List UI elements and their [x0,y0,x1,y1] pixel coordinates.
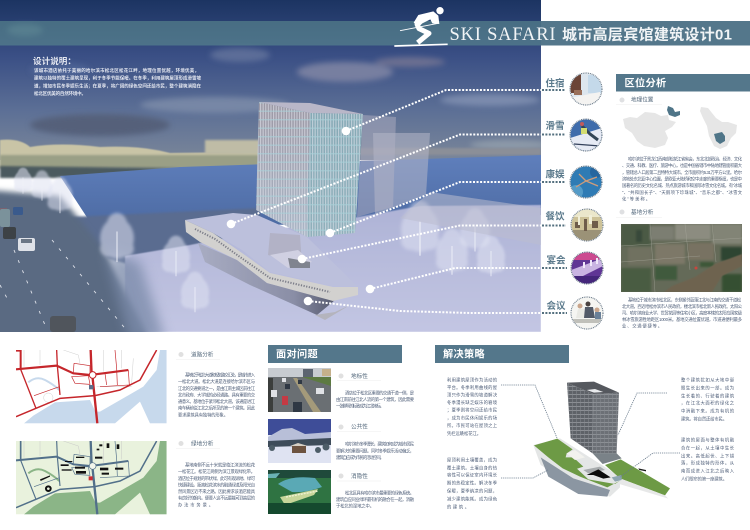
horizon clouds and land [0,140,541,178]
text: location paragraph [622,156,743,202]
text: strategy right top: 眼生长出来的一部。成为 [681,384,734,392]
text: strategy left bottom: 覆土建筑。土壤自身的热 [447,464,498,472]
text: landmark: 由江南前往江北人流的第一个建筑，因此需要 [336,396,415,403]
text: site paragraph: 林冰雪旅游胜地距区1000米。基地交通位置优越，市道通便利最多 [622,316,743,323]
text: strategy left bottom: 屋顶利用土壤覆盖，成为 [447,456,497,464]
heading: problems: 面对问题 [276,348,318,360]
text: strategy right bottom: 建筑的屋面与整体有机融 [681,436,735,444]
text: public: 公共性 [351,422,368,430]
heading: location analysis: 区位分析 [624,76,666,90]
text: landmark: 酒店位于松北区重要的交通干道一侧，是 [345,390,415,396]
ramp [605,459,670,495]
photo: highway [268,368,331,412]
function labels: 会议 [546,300,566,312]
text: public: 哈尔滨市冬季漫长，建筑如何成为城市居民 [345,440,414,448]
text: site paragraph: 业、交通便捷等。 [622,322,662,330]
design notes: 该城市酒店依托于美丽的哈尔滨市松北区松花江畔，地理位置优越，环境优美， [34,67,199,74]
function labels: 滑雪 [546,120,565,132]
diagram: building cutaway [533,382,670,499]
text: strategy right bottom: 落，形成独特的形体。从 [681,460,735,466]
text: strategy left top: 顶只作为滑雪的坡道解决 [447,392,498,398]
text: green space analysis: 酒店位于规划的带状绿。此可有观湖地、绿可 [178,475,256,482]
trees [14,168,505,312]
text: strategy right bottom: 人们眼帘的第一座建筑。 [681,476,727,482]
title [450,25,732,45]
text: green space analysis: 绿地分析 [191,440,214,448]
text: hidden [336,472,415,510]
text: site paragraph: 基地位于城市滨市松北区，东侧紧邻蓝藻江北与江南的交通干道松 [628,296,742,304]
text: strategy right top: ，在江北大面积的绿化之 [681,400,735,406]
text: road analysis: 基地位于松北大道和规划路交汇处，是城市进入 [185,372,256,378]
tower [256,102,363,237]
subheading: geographic location [616,96,662,104]
podium base [533,438,620,497]
river [60,155,541,225]
text: landmark: 地标性 [351,372,368,380]
icon: dining photo [571,209,603,241]
ring borders [570,73,603,329]
panel: location analysis [616,74,750,330]
function labels: 宴会 [546,254,566,266]
clouds [7,24,550,150]
sky background [0,0,541,160]
text: landmark: 一张鲜明的标致成为江北地标。 [336,402,384,410]
text: green space analysis: 办法市务景。 [178,502,213,508]
text: strategy left top: 凭栏远眺松花江。 [447,430,481,437]
text: location paragraph: 化”等美称。 [622,196,650,202]
icon: skier [394,7,448,46]
banner on white [541,21,750,46]
text: strategy right top: 生长着的、行驶着的建筑 [681,392,735,400]
text: location paragraph: 哈尔滨位于黑龙江西南部松花江省省会，东北北部政治、经济、文化 [628,156,743,162]
text: strategy left top: 冬季漫长缺乏娱乐的窘境 [447,399,498,406]
tower faces [567,383,593,453]
text: green space analysis: 快捷建设。距离松花滨水的融通绿道及阳光自 [178,482,255,488]
text: strategy right top: 中消融下来。成为有机的 [681,408,734,414]
text: hidden: 松北区具有哈尔滨市最重要的绿色系统。 [345,490,414,496]
text: strategy right bottom: 出来。高低起伏、上下错 [681,452,735,460]
panel: hero rendering [0,0,550,340]
cars [0,207,76,332]
ghost buildings [357,115,541,245]
text: public [336,422,414,461]
text: location paragraph: 滨地处东北亚中心位置，是欧亚大陆桥和空中走廊的重要枢纽，也是中 [622,176,742,182]
icon: meeting photo [571,297,603,329]
leader lines [501,385,680,478]
text: strategy left top: 利用建筑屋顶作为活动的 [447,376,497,384]
satellite map [621,224,742,292]
road [0,190,150,340]
text: strategy left bottom: 保暖，夏季纳凉的问题， [447,488,497,494]
text: strategy right bottom: 合在一起，从土壤中生长 [681,444,735,452]
label connector dots [542,90,567,313]
text: strategy left bottom [447,456,498,510]
design notes: 设计说明： [33,55,76,66]
text: green space analysis: 然风景区近不来之路。因此要求该酒店能具 [178,488,256,495]
text: road analysis: 道路分析 [191,350,214,358]
text: strategy left bottom: 容性可以保证室内环境长 [447,472,498,478]
text: road analysis: 要求建筑具有独特的形象。 [178,412,228,418]
icon: hotel room photo [570,73,602,105]
far bank [72,208,260,264]
text: strategy right top: 整个建筑犹如从大地中诞 [681,376,735,384]
text: strategy left top: 所。市民可站在屋顶之上 [447,422,498,429]
design notes: 建筑以独特的覆土建筑呈现，利于冬季节能保暖。在冬季，利用建筑屋顶形成滑雪坡 [34,74,202,82]
text: hidden: 消隐性 [351,472,368,480]
design notes [33,55,202,97]
title: 城市高层宾馆建筑设计01 [562,26,732,44]
text: landmark [336,372,415,410]
design notes: 道，增加市民冬季娱乐生活；在夏季，将广阔的绿色空间还给市民，整个建筑消隐在 [34,82,202,90]
map: China [623,106,680,148]
text: road analysis [176,350,256,418]
function labels: 住宿 [546,78,565,90]
text: hidden: 建筑自应同业绿环最有机的融合在一起，消融 [336,496,415,503]
function labels: 康娱 [546,168,565,180]
text: site paragraph [622,296,743,330]
road fade [105,250,165,340]
banner over hero [0,21,541,46]
callout lines [231,90,541,313]
subheading: geographic location: 地理位置 [631,96,654,104]
text: road analysis: 通意义。基地位于紧邻松北大道，该通是进江 [178,398,256,405]
heading: problems [268,345,402,363]
text: green space analysis: 有良好的朝向。便要人这不远最能可到高层的 [178,494,255,502]
text: road analysis: 一松北大道。松北大道是连接哈尔滨市区与 [178,378,255,385]
text: site paragraph: 北大道，西近哈松亦滨市人民政府，楼北滨市松北新人民政府。太阳公 [622,303,743,310]
map: Heilongjiang [700,107,737,149]
text: road analysis: 江北的交通要道之一，是由江南主城区前往江 [178,385,256,392]
road markings [0,240,128,332]
heading: strategies: 解决策略 [443,348,485,360]
function labels: 餐饮 [546,210,565,222]
text: public: 建筑自应成为市民的活动空间。 [336,454,384,461]
text: location paragraph: 、交通、科教、医疗、旅游中心，也是中国省辖市中陆地辖管面积最大 [622,162,743,169]
text: strategy left bottom: 期的热稳定性。解决冬季 [447,480,498,486]
text: road analysis: 北市政府、大学城的必经通路。具有重要的交 [178,392,256,398]
icon: pool photo [570,166,602,198]
photo: snow scene [268,419,331,463]
text: strategy left top: ；夏季则将空间还给市民 [447,406,497,414]
text: strategy right top: 建筑。将自然还给市民。 [681,416,727,422]
text: strategy right bottom [681,436,735,482]
text: strategy left bottom: 减少建筑能耗。成为绿色 [447,496,498,502]
chart: road map [16,350,167,423]
photo: green lake [268,470,331,514]
text: green space analysis [176,440,256,508]
heading: location analysis [616,74,750,92]
green roof left [534,439,620,487]
callout dots [227,127,374,305]
text: strategy left top: 平台。冬季利用曲线的屋 [447,384,498,391]
text: strategy left top: ，成为市民休闲娱乐的场 [447,414,498,422]
text: hidden: 于松北的湿地之中。 [336,502,374,510]
icon: ski photo [570,119,602,151]
heading: strategies [435,345,569,363]
courtyard void [567,450,585,460]
text: green space analysis: 基地南侧不远十米就是临江滨流的松花 [185,462,256,468]
text: green space analysis: 一松花江。松花江两侧为滨江景观绿化带。 [178,468,255,475]
text: location paragraph: 国著名的历史文化名城、热点旅游城市和国际冰雪文化名城。有“冰城 [622,182,743,189]
design notes: 松北区优美的自然环境中。 [34,90,86,97]
function labels [546,78,566,312]
text: strategy right top [681,376,735,422]
chart: green space map [16,441,167,514]
text: location paragraph: ”、“共和国长子”、“天鹅项下珍珠城”、“音乐之都”、“冰雪文 [622,189,743,196]
text: strategy left bottom: 的建筑。 [447,504,469,510]
icon: banquet photo [571,252,603,284]
title: SKI SAFARI [450,25,556,45]
subheading: site analysis [616,208,662,218]
snow ground [125,205,541,332]
subheading: site analysis: 基地分析 [631,208,654,216]
text: road analysis: 南车辆前往江北之后所见的第一个建筑。因此 [178,404,256,412]
text: location paragraph: ，管辖总人口居第二且特特大城市。全市面积约5.31万平方公里。哈尔 [622,169,743,176]
text: site paragraph: 司、哈尔滨商业大学、世贸花园等住宅小区，高度本辖的太阳岛国家级 [622,310,743,316]
text: public: 要解决的重要问题。同时冬季娱乐活动偏乏， [336,448,414,454]
podium building [185,213,358,320]
text: strategy right bottom: 南而成进入江北之后映入 [681,468,735,474]
text: strategy left top [447,376,498,437]
